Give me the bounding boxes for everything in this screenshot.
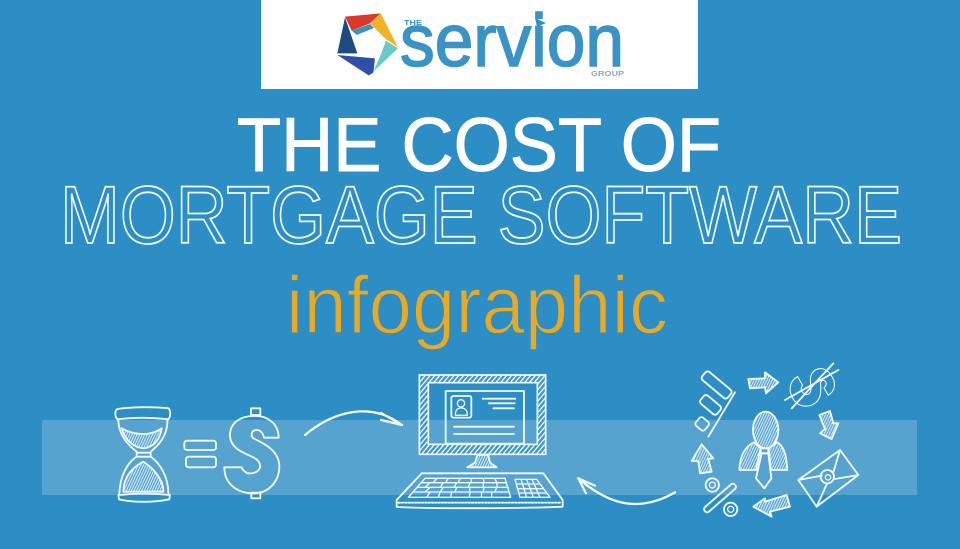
icon: percent [703, 478, 737, 516]
icon: person [739, 412, 787, 488]
icon: computer [397, 375, 563, 508]
logo wordmark: GROUP [591, 71, 624, 78]
icon: up arrow [692, 444, 713, 473]
subtitle: infographic [286, 260, 668, 351]
icon: dollar sign [224, 408, 279, 498]
icon cluster: business person and finance symbols [692, 362, 858, 517]
monitor [419, 375, 546, 454]
keyboard [397, 473, 563, 508]
icon: envelope [798, 450, 858, 507]
icon: equals sign [184, 441, 216, 467]
icon: right arrow [748, 372, 778, 393]
title line 1: THE COST OF [237, 103, 721, 188]
icon: crossed dollar [784, 362, 839, 412]
logo mark: pentagon [337, 13, 398, 75]
icon: hourglass [115, 407, 170, 502]
icon: bar chart [694, 370, 735, 437]
logo wordmark: servion [400, 0, 624, 82]
translucent band [42, 420, 917, 495]
logo wordmark: THE [404, 20, 422, 27]
icon: down arrow [819, 411, 838, 439]
icon: left arrow [753, 495, 790, 517]
arrow: people to computer [578, 478, 675, 504]
monitor stand [467, 455, 497, 467]
arrow: dollar to computer [305, 411, 402, 435]
logo panel [261, 0, 698, 89]
